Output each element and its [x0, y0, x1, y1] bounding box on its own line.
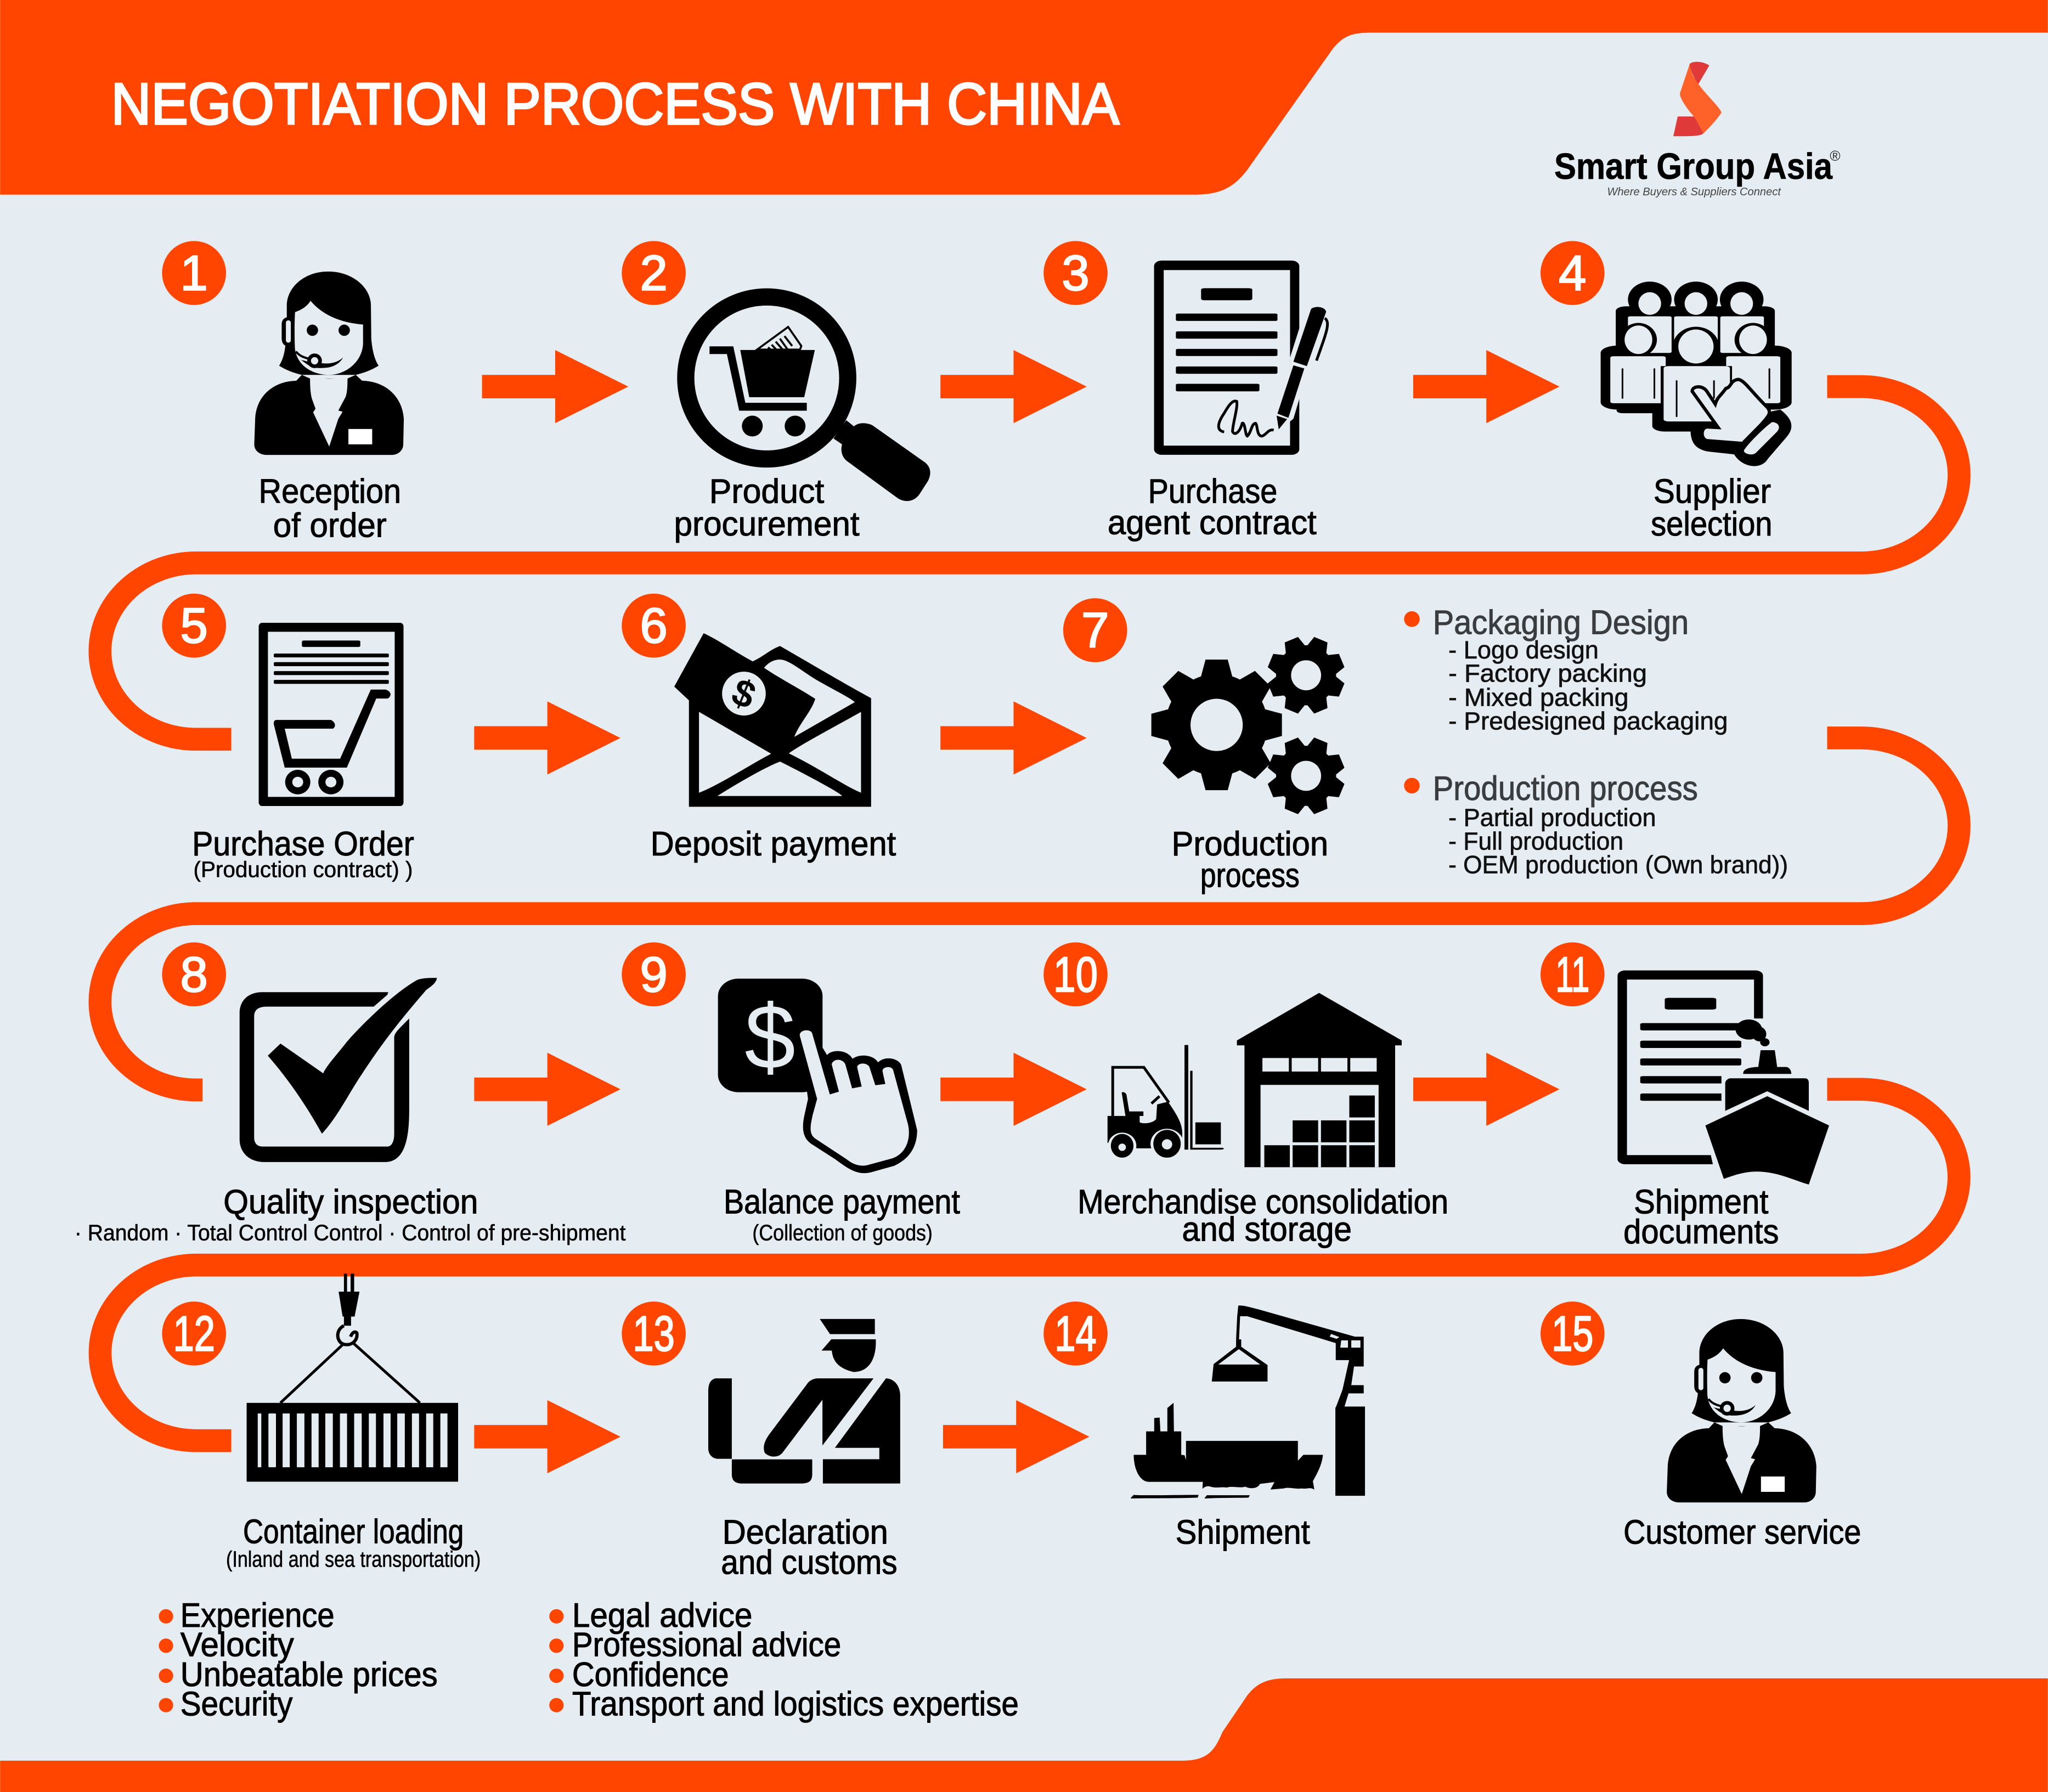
- step 5: purchase order: [162, 594, 414, 882]
- number badge 3: [1043, 241, 1108, 305]
- bottom banner: [0, 1678, 2048, 1792]
- logo wordmark: Smart Group Asia: [1554, 146, 1833, 187]
- snake connector path: [100, 387, 1959, 1441]
- number badge 5: 5: [180, 598, 208, 653]
- label: Declaration: [723, 1514, 888, 1552]
- logo: Smart Group Asia: [1554, 62, 1841, 198]
- number badge 4: [1541, 241, 1605, 305]
- step 7: production process: [1063, 598, 1356, 894]
- step 15: customer service: [1541, 1301, 1861, 1552]
- number badge 6: 6: [640, 598, 668, 653]
- icon: envelope with banknote: [674, 633, 871, 807]
- label: Quality inspection: [223, 1183, 478, 1221]
- list: packaging design: - Factory packing: [1448, 660, 1647, 688]
- step 13: declaration and customs: [622, 1301, 900, 1581]
- icon: ribbon S: [1673, 62, 1722, 136]
- label: (Inland and sea transportation): [226, 1546, 481, 1571]
- number badge 5: [162, 594, 226, 658]
- list: production process: - Partial production: [1448, 804, 1656, 832]
- step 11: shipment documents: [1541, 943, 1829, 1251]
- logo tagline: Where Buyers & Suppliers Connect: [1607, 186, 1781, 198]
- arrow 2 to 3: [940, 350, 1087, 423]
- number badge 9: [622, 943, 686, 1006]
- label: Deposit payment: [651, 825, 896, 863]
- label: Customer service: [1623, 1514, 1861, 1552]
- step 4: supplier selection: [1541, 241, 1792, 543]
- number badge 2: 2: [640, 245, 668, 301]
- number badge 15: 15: [1551, 1306, 1593, 1361]
- label: Shipment: [1176, 1514, 1310, 1552]
- label: Container loading: [243, 1513, 464, 1551]
- bullet list: benefits right: Transport and logistics expertise: [572, 1686, 1019, 1723]
- number badge 12: [162, 1301, 226, 1366]
- bullet list: benefits right: [549, 1597, 1019, 1723]
- icon: gears: [1152, 625, 1356, 826]
- step 1: reception of order: [162, 241, 404, 544]
- arrow 3 to 4: [1413, 350, 1559, 423]
- icon: container on crane hook: [247, 1273, 458, 1481]
- list: production process: [1404, 770, 1788, 878]
- label: Reception: [259, 472, 401, 510]
- label: [721, 1514, 898, 1581]
- step 14: shipment: [1043, 1301, 1365, 1552]
- list: production process: Production process: [1433, 770, 1698, 808]
- number badge 2: [622, 241, 686, 305]
- number badge 8: 8: [180, 947, 208, 1002]
- number badge 7: [1063, 598, 1127, 662]
- number badge 13: 13: [633, 1306, 675, 1361]
- registered mark: ®: [1830, 148, 1841, 164]
- label: [1171, 825, 1328, 894]
- bullet list: benefits left: Experience: [180, 1597, 335, 1635]
- label: [226, 1513, 481, 1571]
- list: packaging design: - Logo design: [1448, 636, 1599, 664]
- arrow 5 to 6: [474, 701, 620, 775]
- step 9: balance payment: [622, 943, 960, 1245]
- number badge 3: 3: [1062, 245, 1090, 301]
- step 3: purchase agent contract: [1043, 241, 1331, 542]
- label: process: [1200, 856, 1300, 894]
- label: · Random · Total Control Control · Control of pre-shipment: [75, 1220, 625, 1245]
- label: [1651, 472, 1773, 543]
- number badge 11: 11: [1555, 947, 1589, 1002]
- number badge 7: 7: [1081, 603, 1109, 658]
- list: production process: - Full production: [1448, 827, 1623, 855]
- label: [1108, 472, 1317, 542]
- label: and customs: [721, 1543, 898, 1581]
- number badge 4: 4: [1559, 245, 1586, 301]
- bullet list: benefits right: Professional advice: [572, 1626, 841, 1664]
- icon: group of people with pointing hand: [1601, 281, 1792, 466]
- number badge 9: 9: [640, 947, 668, 1002]
- list: packaging design: - Predesigned packaging: [1448, 707, 1728, 735]
- label: (Production contract) ): [194, 856, 413, 882]
- arrow 8 to 9: [474, 1053, 620, 1126]
- step 12: container loading: [162, 1273, 481, 1571]
- arrow 9 to 10: [940, 1053, 1087, 1126]
- arrow 6 to 7: [940, 701, 1087, 775]
- label: [192, 825, 414, 882]
- label: agent contract: [1108, 504, 1317, 542]
- bullet list: benefits right: Legal advice: [572, 1597, 752, 1635]
- label: [75, 1183, 625, 1245]
- step 2: product procurement: [622, 241, 930, 543]
- icon: hand pressing dollar button: [718, 979, 917, 1173]
- number badge 1: [162, 241, 226, 305]
- list: packaging design: Packaging Design: [1433, 604, 1689, 642]
- icon: customer service agent: [1667, 1319, 1816, 1502]
- bullet list: benefits left: [159, 1597, 438, 1723]
- number badge 1: 1: [180, 245, 208, 301]
- step 6: deposit payment: [622, 594, 896, 863]
- header banner: [0, 0, 2048, 195]
- list: packaging design: - Mixed packing: [1448, 684, 1629, 712]
- label: [259, 472, 401, 544]
- label: Production: [1171, 825, 1328, 863]
- icon: signed contract with pen: [1154, 261, 1331, 455]
- label: [674, 472, 860, 543]
- bullet list: benefits left: Velocity: [180, 1626, 294, 1664]
- label: [724, 1183, 960, 1245]
- list: production process: - OEM production (Own brand)): [1448, 850, 1788, 878]
- label: of order: [273, 506, 387, 544]
- icon: port crane and cargo ship: [1131, 1305, 1365, 1498]
- bullet list: benefits left: Unbeatable prices: [180, 1656, 438, 1694]
- number badge 10: 10: [1053, 947, 1098, 1002]
- label: (Collection of goods): [752, 1220, 933, 1245]
- number badge 14: 14: [1054, 1306, 1097, 1361]
- number badge 13: [622, 1301, 686, 1366]
- icon: envelope with banknote: $: [726, 670, 761, 717]
- label: documents: [1623, 1213, 1779, 1251]
- bullet list: benefits right: Confidence: [572, 1656, 729, 1694]
- arrow 10 to 11: [1413, 1053, 1559, 1126]
- icon: checkbox: [240, 978, 437, 1162]
- label: Shipment: [1634, 1183, 1768, 1221]
- label: [1623, 1183, 1779, 1251]
- label: Merchandise consolidation: [1077, 1183, 1448, 1221]
- number badge 14: [1043, 1301, 1108, 1366]
- arrow 1 to 2: [482, 350, 628, 423]
- step 8: quality inspection: [75, 943, 625, 1245]
- number badge 11: [1541, 943, 1605, 1006]
- label: Purchase: [1148, 472, 1277, 510]
- label: procurement: [674, 505, 860, 543]
- label: Supplier: [1654, 472, 1771, 510]
- arrow 13 to 14: [943, 1400, 1090, 1473]
- number badge 8: [162, 943, 226, 1006]
- icon: hand pressing dollar button: $: [744, 986, 795, 1088]
- arrow 12 to 13: [474, 1400, 620, 1473]
- label: Balance payment: [724, 1183, 960, 1221]
- number badge 12: 12: [173, 1306, 215, 1361]
- list: packaging design: [1404, 604, 1728, 735]
- bullet list: benefits left: Security: [180, 1686, 292, 1723]
- step 10: merchandise consolidation: [1043, 943, 1448, 1248]
- number badge 6: [622, 594, 686, 658]
- label: selection: [1651, 505, 1773, 543]
- label: Purchase Order: [192, 825, 414, 863]
- icon: document with ship: [1617, 971, 1829, 1185]
- icon: agent with headset: [254, 272, 404, 455]
- number badge 15: [1541, 1301, 1605, 1366]
- icon: customs officer: [708, 1319, 900, 1484]
- icon: forklift and warehouse: [1108, 993, 1402, 1167]
- label: and storage: [1182, 1210, 1352, 1248]
- title: NEGOTIATION PROCESS WITH CHINA: [111, 71, 1120, 137]
- icon: magnifier with cart: [686, 297, 930, 501]
- label: [1077, 1183, 1448, 1248]
- icon: order form with cart: [259, 623, 403, 806]
- label: Product: [709, 472, 824, 510]
